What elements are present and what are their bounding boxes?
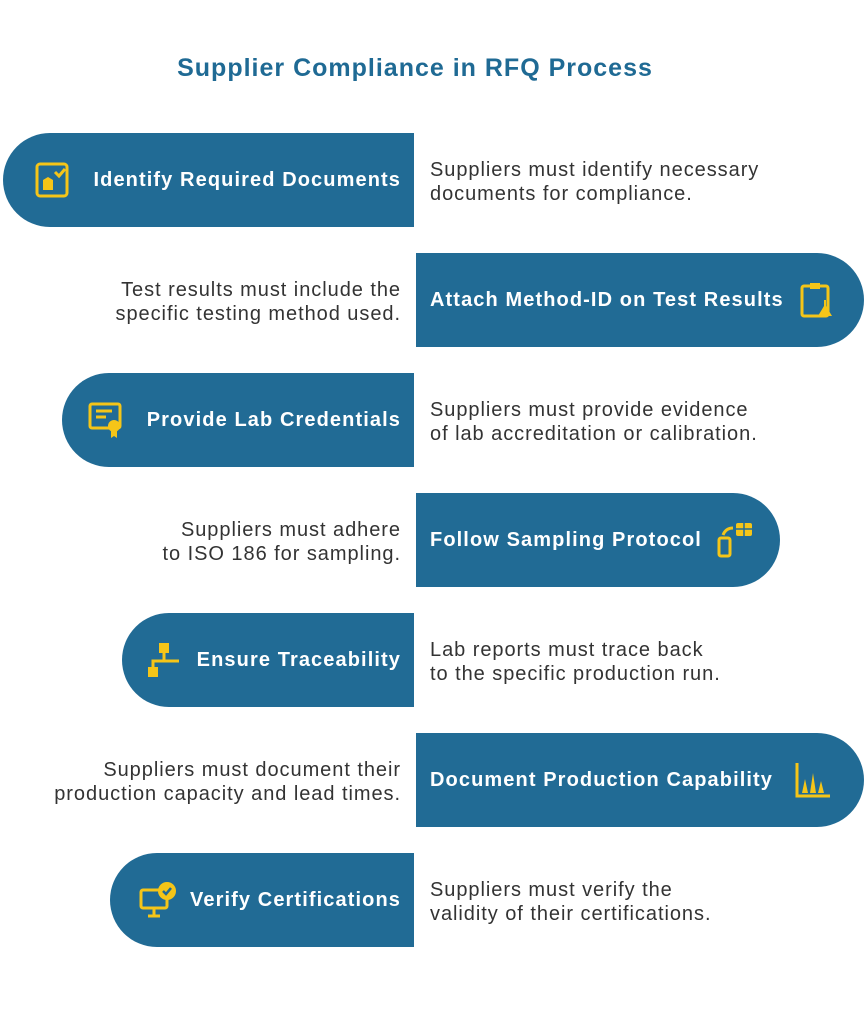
description 5: to the specific production run. bbox=[430, 663, 721, 685]
bar: ensure traceability: Ensure Traceability bbox=[197, 648, 401, 670]
description 2 bbox=[116, 279, 401, 325]
icon: factory chart bbox=[796, 763, 830, 798]
description 5 bbox=[430, 639, 721, 685]
description 2: Test results must include the bbox=[121, 279, 401, 301]
description 3 bbox=[430, 399, 758, 445]
bar: provide lab credentials bbox=[62, 373, 414, 467]
icon: flow tree bbox=[148, 643, 179, 677]
description 3: of lab accreditation or calibration. bbox=[430, 423, 758, 445]
title: Supplier Compliance in RFQ Process bbox=[177, 54, 653, 82]
description 6: production capacity and lead times. bbox=[54, 783, 401, 805]
description 2: specific testing method used. bbox=[116, 303, 401, 325]
bar: ensure traceability bbox=[122, 613, 414, 707]
bar: provide lab credentials: Provide Lab Credentials bbox=[147, 408, 401, 430]
description 5: Lab reports must trace back bbox=[430, 639, 704, 661]
description 7 bbox=[430, 879, 711, 925]
bar: follow sampling protocol bbox=[416, 493, 780, 587]
bar: document production capability: Document Production Capability bbox=[430, 768, 773, 790]
description 4 bbox=[162, 519, 401, 565]
icon: clipboard flask bbox=[800, 283, 832, 318]
description 4: Suppliers must adhere bbox=[181, 519, 401, 541]
bar: attach method-id bbox=[416, 253, 864, 347]
icon: certificate bbox=[88, 402, 122, 438]
description 1: Suppliers must identify necessary bbox=[430, 159, 759, 181]
icon: monitor check bbox=[140, 882, 176, 918]
description 6: Suppliers must document their bbox=[103, 759, 401, 781]
icon: sampling bbox=[718, 523, 752, 558]
bar: verify certifications bbox=[110, 853, 414, 947]
bar: verify certifications: Verify Certifications bbox=[190, 888, 401, 910]
bar: follow sampling protocol: Follow Sampling Protocol bbox=[430, 528, 702, 550]
icon: document bbox=[36, 162, 68, 198]
bar: attach method-id: Attach Method-ID on Test Results bbox=[430, 288, 784, 310]
bar: identify required documents bbox=[3, 133, 414, 227]
description 6 bbox=[54, 759, 401, 805]
bar: document production capability bbox=[416, 733, 864, 827]
description 7: Suppliers must verify the bbox=[430, 879, 673, 901]
description 4: to ISO 186 for sampling. bbox=[163, 543, 401, 565]
description 3: Suppliers must provide evidence bbox=[430, 399, 748, 421]
bar: identify required documents: Identify Required Documents bbox=[93, 168, 401, 190]
description 7: validity of their certifications. bbox=[430, 903, 711, 925]
description 1: documents for compliance. bbox=[430, 183, 693, 205]
description 1 bbox=[430, 159, 759, 205]
